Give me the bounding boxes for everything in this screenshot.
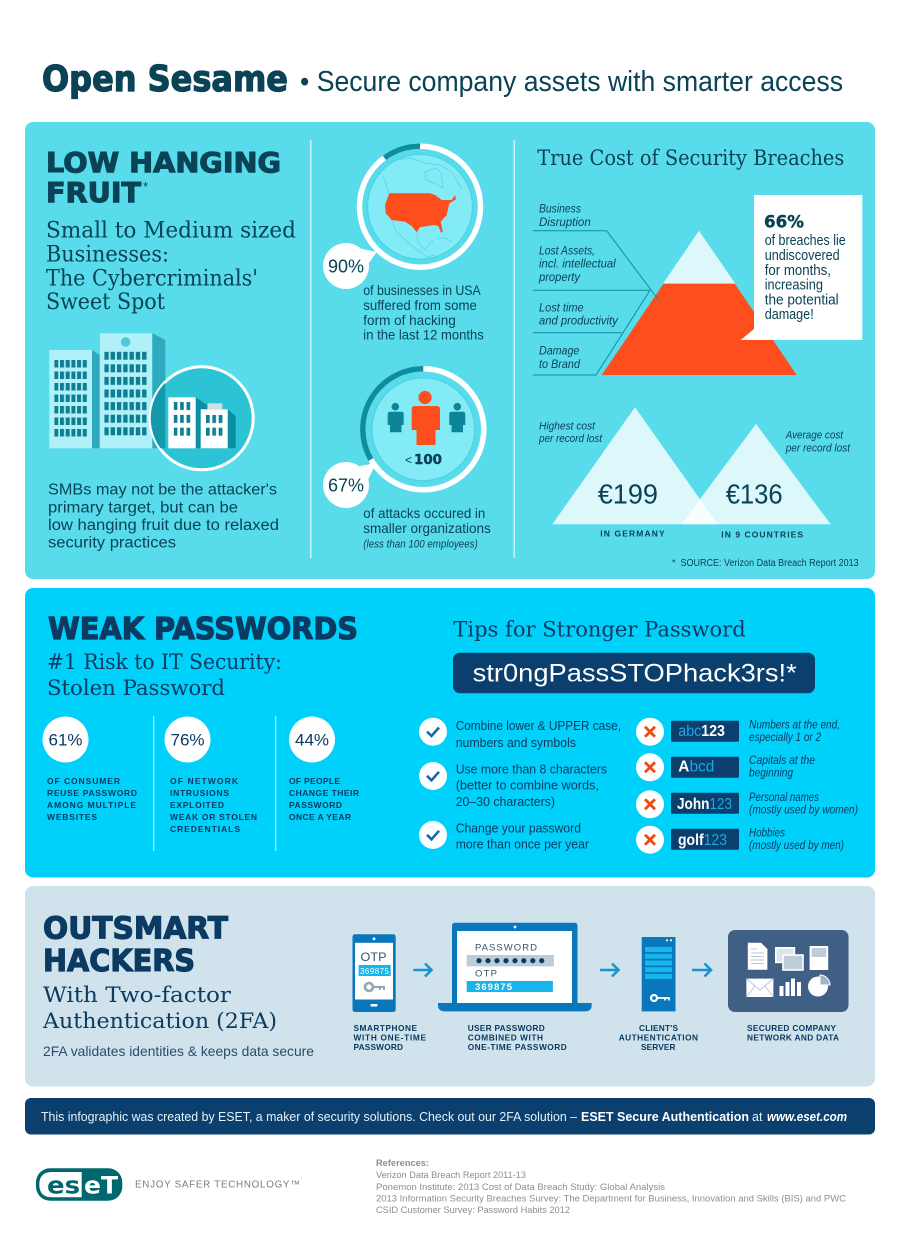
logo: ESET: eT [84,1172,119,1200]
labels: pyramid layers: and productivity [539,313,619,327]
tip: combine case [419,718,621,750]
map outlines [383,158,462,257]
subheading: cybercriminals' sweet spot: Businesses: [46,242,169,268]
stat: 44%: 44% [295,730,329,750]
text: SMB summary: low hanging fruit due to relaxed [48,517,279,534]
tip: length: (better to combine words, [456,778,599,793]
bad example: personal names: (mostly used by women) [749,805,858,817]
text: SMB summary: primary target, but can be [48,500,238,516]
tip: length: Use more than 8 characters [456,761,607,776]
caption: smartphone: SMARTPHONE [354,1023,417,1033]
labels: pyramid layers: Lost Assets, [539,244,595,258]
text: 90% description: in the last 12 months [363,328,484,342]
bad example: capitals at the beginning: Abcd [678,759,714,776]
tip: change often [419,820,590,852]
subheading: risk to IT security: Stolen Password [47,676,225,701]
references: CSID Customer Survey: Password Habits 2012 [376,1205,570,1216]
example password pill: str0ngPassSTOPhack3rs!* [473,660,797,688]
caption: smartphone [354,1023,426,1052]
labels: pyramid layers: Damage [539,344,580,358]
arrow [600,964,618,976]
callout: 66%: the potential [765,293,839,309]
callout: 66%: damage! [765,307,814,323]
label: average cost [785,430,851,454]
bad example: numbers at the end: Numbers at the end, [749,719,840,731]
callout: 66%: of breaches lie [765,233,846,249]
caption: user password: ONE-TIME PASSWORD [468,1042,567,1052]
text: SMB summary: SMBs may not be the attacker's [48,482,277,498]
references [376,1158,846,1216]
text: SMB summary: security practices [48,534,176,552]
subheading: cybercriminals' sweet spot: Small to Medium sized [46,218,296,244]
panel: outsmart hackers [25,886,875,1086]
chart: cost per record triangles [538,407,851,540]
bubble: 67% [323,462,376,508]
icon: laptop with password form [438,923,592,1011]
heading: tips for stronger password: Tips for Stronger Password [453,618,746,643]
label: highest cost: per record lost [538,433,603,445]
text: 90% description: of businesses in USA [363,283,482,298]
label: highest cost [538,420,603,445]
icon: laptop with password form: OTP [475,968,497,980]
label: average cost: per record lost [785,442,851,454]
icon: smartphone with OTP [352,934,396,1012]
text: SMB summary [48,482,279,552]
panel: weak passwords [25,588,875,878]
tip: change often: more than once per year [456,837,590,852]
bubble: 67%: 67% [328,475,364,495]
heading: low hanging fruit [46,147,281,209]
stat: 76% [164,716,257,834]
callout: 66%: for months, [765,263,831,279]
chart: 67% smaller organizations [323,369,484,508]
subheading: risk to IT security: #1 Risk to IT Security: [47,650,282,675]
footer banner [25,1098,875,1134]
subheading: cybercriminals' sweet spot: The Cybercriminals' [46,266,258,292]
callout: 66% [741,195,862,340]
stat: 61%: 61% [48,730,83,750]
icon: authentication server [642,937,676,1011]
stat: 61%: OF CONSUMER [47,776,120,786]
heading: low hanging fruit: LOW HANGING [46,147,281,179]
stat: 44%: OF PEOPLE [289,776,340,786]
stat: 76%: CREDENTIALS [170,824,240,834]
caption: authentication server: CLIENT'S [639,1023,678,1033]
label: less than 100: < [405,453,412,467]
logo: ESET: es [47,1172,80,1200]
stat: 61%: WEBSITES [47,812,97,822]
tip: combine case: Combine lower & UPPER case, [456,718,621,733]
bad example: capitals at the beginning: beginning [749,768,794,780]
tip: length: 20–30 characters) [456,794,555,809]
stat: 44%: PASSWORD [289,800,342,810]
bad example: hobbies: Hobbies [749,828,785,840]
text: 90% description: form of hacking [363,313,456,328]
label: highest cost: Highest cost [539,420,596,432]
icon: smartphone with OTP: 369875 [360,967,390,976]
subheading: risk to IT security [47,650,282,701]
bubble: 90% [323,243,377,289]
icon: people [388,391,465,445]
subheading: cybercriminals' sweet spot [46,218,296,315]
bad example: hobbies: (mostly used by men) [749,840,844,852]
stat: 76%: WEAK OR STOLEN [170,812,257,822]
title: Open Sesame [42,59,288,100]
caption: secured network [747,1023,839,1043]
stat: 76%: INTRUSIONS [170,788,229,798]
references: Verizon Data Breach Report 2011-13 [376,1170,526,1181]
subheading: two-factor authentication: With Two-factor [43,983,232,1008]
heading: outsmart hackers: HACKERS [43,944,195,979]
text: 2FA summary: 2FA validates identities & keeps data secure [43,1044,314,1059]
callout: 66%: 66% [764,212,804,232]
icon: office buildings [49,333,253,470]
caption: user password: COMBINED WITH [468,1033,543,1043]
bad example: numbers at the end: especially 1 or 2 [749,732,822,744]
labels: pyramid layers [538,202,619,371]
labels: pyramid layers: to Brand [539,357,580,371]
example password pill [453,653,815,693]
tagline: ENJOY SAFER TECHNOLOGY™ [135,1180,300,1191]
text: 90% description: suffered from some [363,298,477,313]
subheading: two-factor authentication [42,983,277,1034]
heading: outsmart hackers: OUTSMART [43,912,228,946]
bad example: numbers at the end: abc123 [678,723,725,740]
heading: low hanging fruit: FRUIT [46,177,141,209]
bad example: personal names: John123 [677,796,732,813]
stat: 44%: ONCE A YEAR [289,812,351,822]
bad example: capitals at the beginning [636,753,815,781]
bubble: 90%: 90% [328,256,364,276]
text: 67% description [363,506,491,550]
text: 67% description: of attacks occured in [363,506,485,521]
caption: authentication server: AUTHENTICATION [619,1033,698,1043]
label: in 9 countries: IN 9 COUNTRIES [721,530,803,540]
bad example: personal names: Personal names [749,792,819,804]
bad example: capitals at the beginning: Capitals at the [749,755,815,767]
subheading: two-factor authentication: Authentication (2FA) [42,1009,277,1034]
labels: pyramid layers: property [538,270,581,284]
chart: cost pyramid [533,202,797,375]
callout: 66%: increasing [765,278,823,294]
tip: length [419,761,607,809]
panel: low hanging fruit [25,122,875,579]
icon: smartphone with OTP: OTP [360,952,387,964]
bad example: hobbies: golf123 [678,832,727,849]
references: 2013 Information Security Breaches Survey: The Department for Business, Innovation and Skills (BIS) and PWC [376,1194,846,1204]
logo: ESET [36,1168,122,1201]
stat: 76%: EXPLOITED [170,800,224,810]
stat: 61%: REUSE PASSWORD [47,788,137,798]
text: 90% description [363,283,484,342]
bad example: hobbies [636,826,844,854]
value: 199 euro: €199 [598,478,658,509]
caption: smartphone: WITH ONE-TIME [354,1033,426,1043]
caption: smartphone: PASSWORD [354,1042,403,1052]
bad example: personal names [636,790,858,818]
footer banner: ESET Secure Authentication [581,1110,749,1124]
heading: low hanging fruit: * [143,179,148,194]
icon: secured company network [728,930,848,1012]
chart: 90% USA globe [323,146,480,289]
labels: pyramid layers: Business [539,202,581,216]
caption: user password: USER PASSWORD [468,1023,545,1033]
callout: 66%: undiscovered [765,248,840,264]
heading: outsmart hackers [43,912,228,979]
heading: weak passwords: WEAK PASSWORDS [48,612,358,647]
label: in germany: IN GERMANY [600,529,665,539]
caption: authentication server [619,1023,698,1052]
caption: authentication server: SERVER [641,1042,676,1052]
label: less than 100: 100 [414,453,442,468]
icon: USA map [385,193,456,233]
caption: user password [468,1023,567,1052]
text: 67% description: (less than 100 employees) [363,538,478,550]
arrow [413,964,432,976]
stat: 76%: 76% [170,730,205,750]
caption: secured network: NETWORK AND DATA [747,1033,839,1043]
arrow [692,964,711,976]
label: average cost: Average cost [785,430,844,442]
stat: 76%: OF NETWORK [170,776,239,786]
icon: laptop with password form: PASSWORD [475,942,537,954]
references: Ponemon Institute: 2013 Cost of Data Breach Study: Global Analysis [376,1182,665,1193]
source note: * SOURCE: Verizon Data Breach Report 2013 [672,558,859,569]
value: 136 euro: €136 [726,478,783,509]
stat: 61%: AMONG MULTIPLE [47,800,136,810]
subheading: cybercriminals' sweet spot: Sweet Spot [46,290,165,315]
footer banner: www.eset.com [767,1110,847,1124]
title [42,59,843,100]
stat: 44%: CHANGE THEIR [289,788,359,798]
title: • Secure company assets with smarter access [300,66,843,98]
references: References: [376,1158,429,1169]
labels: pyramid layers: Disruption [539,215,591,229]
tip: change often: Change your password [456,820,581,835]
icon: laptop with password form: 369875 [475,982,513,993]
labels: pyramid layers: Lost time [539,300,584,314]
text: 67% description: smaller organizations [363,521,491,536]
bad example: numbers at the end [636,718,840,746]
tip: combine case: numbers and symbols [456,735,576,750]
labels: pyramid layers: incl. intellectual [539,257,616,271]
stat: 61% [42,716,137,822]
heading: true cost of security breaches: True Cost of Security Breaches [537,146,844,171]
stat: 44% [289,716,359,822]
footer banner: at [752,1110,763,1124]
caption: secured network: SECURED COMPANY [747,1023,836,1033]
footer banner: This infographic was created by ESET, a maker of security solutions. Check out our 2FA solution – [41,1110,577,1124]
